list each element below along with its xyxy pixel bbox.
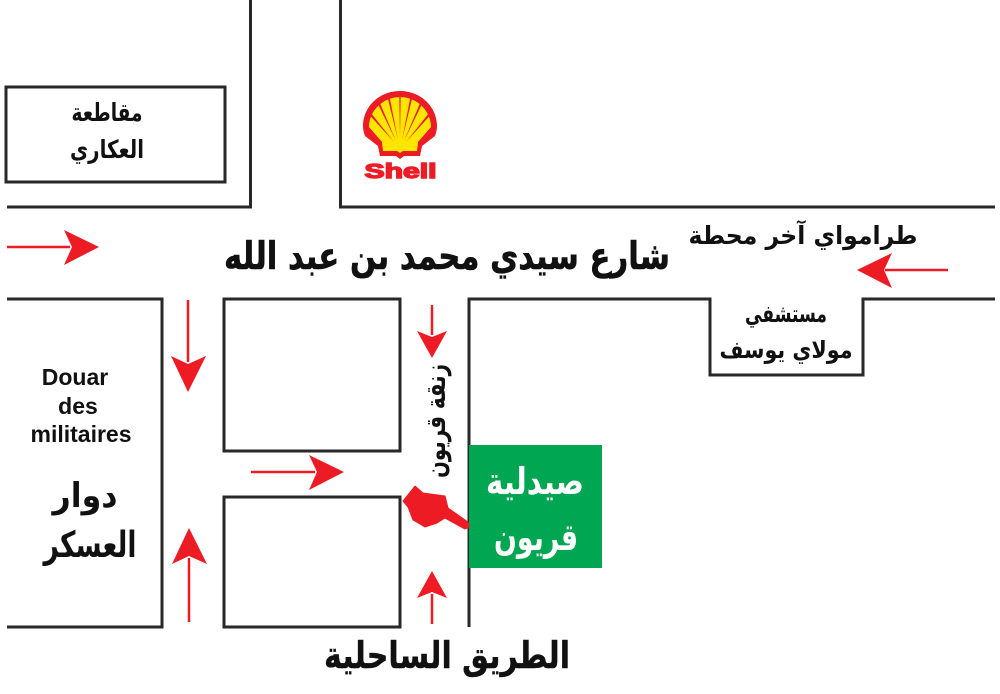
panel: pharmacy green box: قريون — [494, 516, 578, 559]
icon: Shell logo: Shell — [364, 161, 436, 183]
block: real estate office: العكاري — [70, 135, 144, 165]
arrow: side street eastbound — [251, 455, 344, 490]
label: douar des militaires french — [30, 364, 132, 447]
heading: coastal road: الطريق الساحلية — [324, 634, 570, 677]
label: hospital — [720, 300, 852, 364]
arrow: left road northbound — [172, 528, 207, 622]
label: tram station: طرامواي آخر محطة — [688, 220, 918, 251]
icon: Shell logo — [363, 91, 437, 183]
label: hospital: مولاي يوسف — [720, 336, 852, 364]
label: douar arabic: دوار — [51, 476, 118, 516]
label: alley name vertical: زنقة قريون — [421, 364, 452, 478]
arrow: left road southbound — [171, 300, 206, 392]
label: hospital: مستشفي — [745, 300, 827, 328]
label: douar arabic — [42, 476, 137, 566]
block: real estate office: مقاطعة — [72, 98, 142, 127]
city block upper — [224, 299, 400, 451]
city block lower — [224, 497, 400, 627]
label: douar des militaires french: Douar — [42, 364, 108, 390]
arrow: alley southbound — [417, 305, 447, 358]
arrow: alley northbound — [417, 571, 447, 624]
label: douar des militaires french: des — [58, 393, 98, 419]
arrow: main street westbound — [857, 253, 948, 288]
panel: pharmacy green box: صيدلية — [486, 460, 584, 503]
label: douar des militaires french: militaires — [30, 421, 132, 447]
block: real estate office — [6, 87, 225, 182]
icon: pointing hand — [403, 486, 469, 529]
arrow: main street eastbound — [7, 230, 99, 265]
heading: main street name: شارع سيدي محمد بن عبد الله — [224, 234, 670, 278]
panel: pharmacy green box — [469, 445, 602, 568]
label: douar arabic: العسكر — [42, 525, 137, 566]
